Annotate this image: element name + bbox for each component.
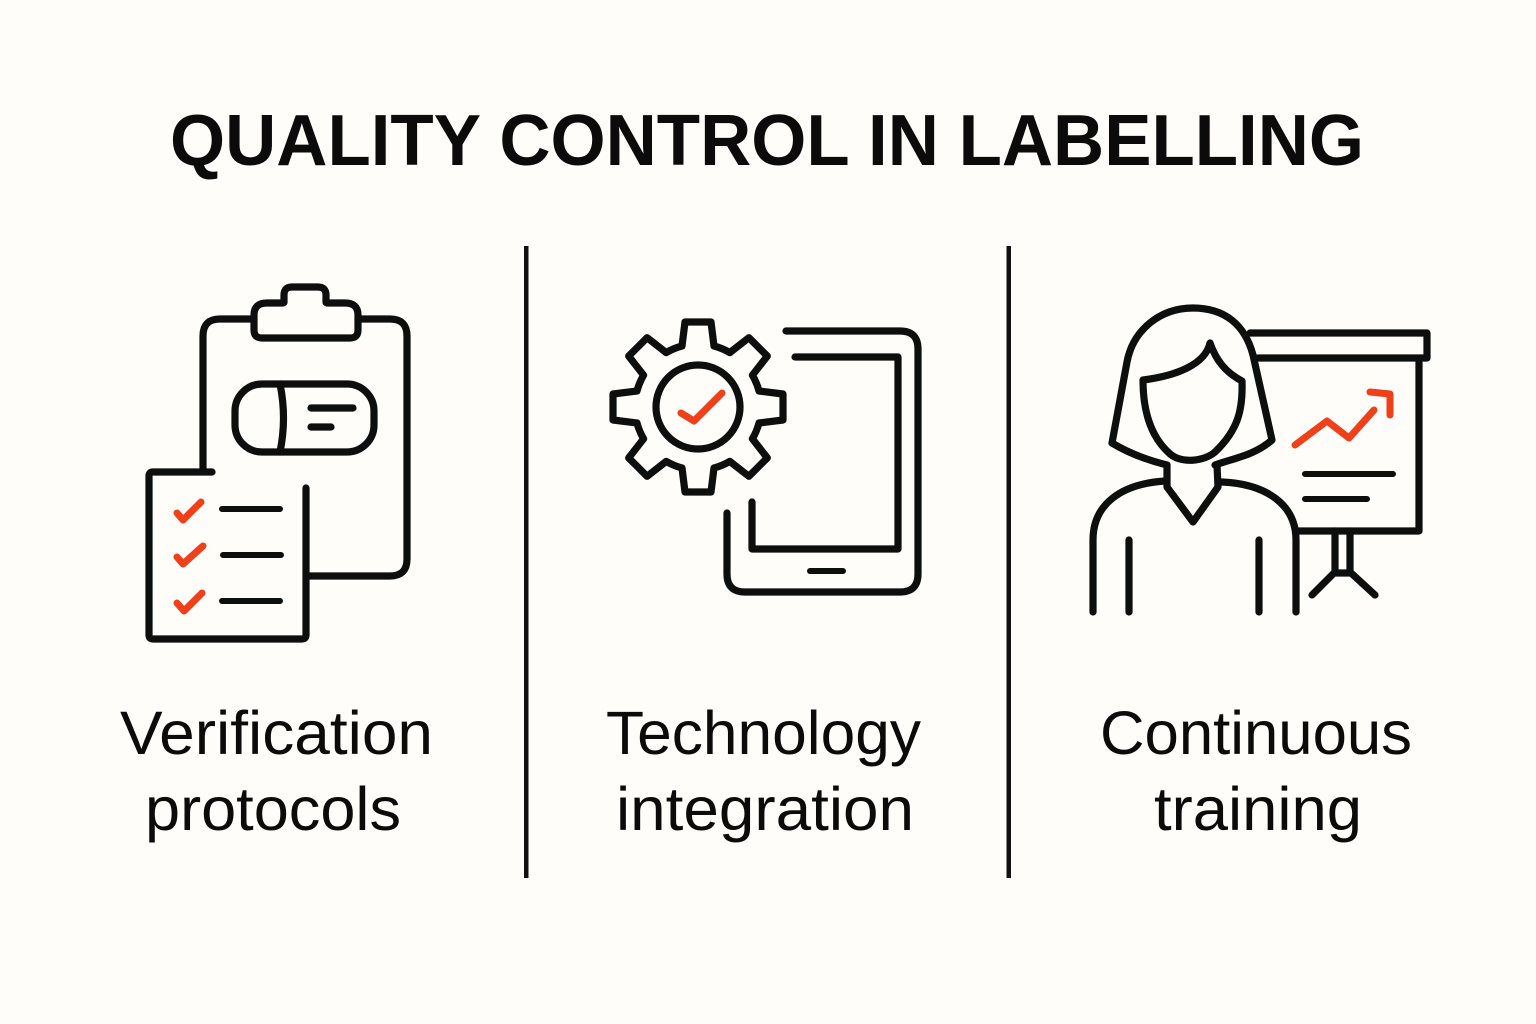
check mark xyxy=(681,393,722,421)
board stand xyxy=(1312,531,1375,595)
checklist paper xyxy=(149,472,306,639)
clipboard board xyxy=(203,319,407,576)
icon: clipboard with checklist xyxy=(149,287,407,639)
panel: technology integration xyxy=(606,322,922,843)
shoulders and arms xyxy=(1093,481,1296,612)
rising chart arrow xyxy=(1295,392,1390,445)
icon: gear and tablet xyxy=(613,322,918,592)
hair xyxy=(1112,308,1272,465)
tablet outer xyxy=(727,331,918,592)
divider left xyxy=(524,246,528,878)
board text lines xyxy=(1305,474,1393,499)
presentation board xyxy=(1250,333,1427,531)
icon: trainer with presentation board xyxy=(1093,308,1427,612)
label: continuous training: training xyxy=(1154,775,1362,843)
label: verification protocols: protocols xyxy=(145,775,401,843)
tablet screen xyxy=(752,357,898,549)
gear xyxy=(613,322,783,492)
face xyxy=(1143,343,1242,460)
label pill xyxy=(235,384,374,452)
divider right xyxy=(1006,246,1011,878)
label: verification protocols: Verification xyxy=(120,699,433,767)
tablet home button xyxy=(810,568,843,574)
checklist lines xyxy=(222,509,281,601)
clipboard clip xyxy=(254,287,358,338)
label: continuous training: Continuous xyxy=(1100,699,1412,767)
collar xyxy=(1167,465,1218,522)
panel: verification protocols xyxy=(120,287,433,843)
gear hub xyxy=(656,365,740,449)
title: QUALITY CONTROL IN LABELLING xyxy=(170,101,1364,181)
check marks xyxy=(177,502,203,611)
label: technology integration: Technology xyxy=(606,699,922,767)
panel: continuous training xyxy=(1093,308,1427,843)
label: technology integration: integration xyxy=(616,775,914,843)
